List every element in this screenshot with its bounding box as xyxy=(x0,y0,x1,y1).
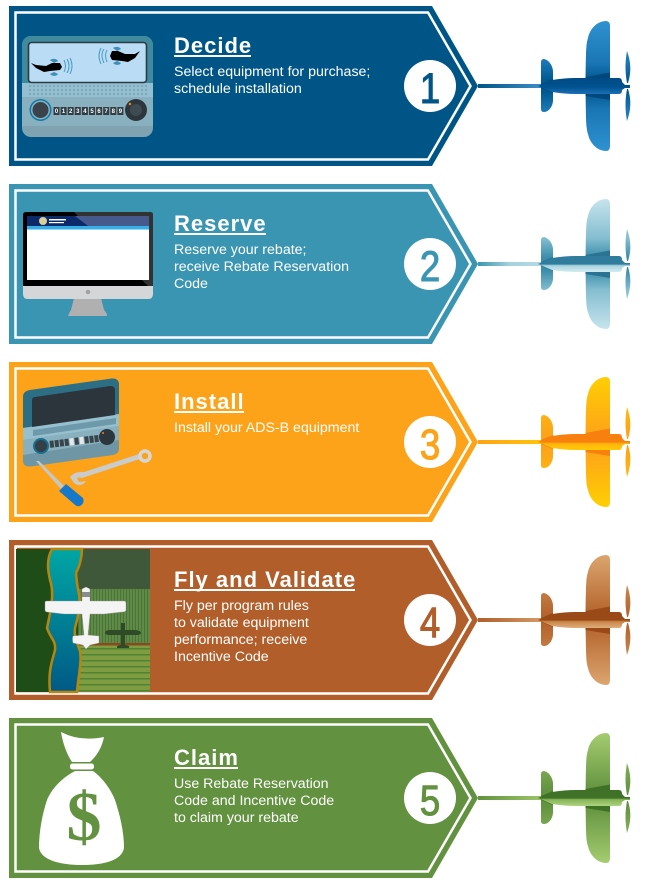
heading: decide: Decide xyxy=(174,33,252,58)
text: decide description: Select equipment for purchase; xyxy=(174,64,370,80)
inner border 2 xyxy=(16,190,470,338)
connector line 4 xyxy=(478,618,542,622)
inner border 1 xyxy=(16,12,470,160)
icon: ADS-B receiver with planes: 8 xyxy=(112,109,116,115)
panel: step 2 reserve xyxy=(9,184,630,344)
text: fly and validate description: Fly per program rules xyxy=(174,598,309,614)
icon: ADS-B receiver with planes: 5 xyxy=(90,109,94,115)
arrow panel shape 1 xyxy=(9,6,478,166)
connector line 1 xyxy=(478,84,542,88)
icon: ADS-B receiver with planes: 3 xyxy=(76,109,80,115)
inner border 4 xyxy=(16,546,470,694)
text: claim description: Use Rebate Reservation xyxy=(174,776,329,792)
icon: ADS-B receiver with planes xyxy=(22,36,153,137)
arrow panel shape 5 xyxy=(9,718,478,878)
number badge 5: 5 xyxy=(420,777,440,825)
icon: plane 3 xyxy=(538,377,630,507)
icon: ADS-B receiver with planes: 7 xyxy=(105,109,109,115)
icon: money bag xyxy=(39,732,124,865)
number badge 3: 3 xyxy=(420,421,440,469)
text: reserve description: receive Rebate Reservation xyxy=(174,259,349,275)
connector line 2 xyxy=(478,262,542,266)
number badge 4: 4 xyxy=(420,599,440,647)
icon: plane 2 xyxy=(538,199,630,329)
heading: install: Install xyxy=(174,389,245,414)
icon: plane 5 xyxy=(538,733,630,863)
icon: money bag: $ xyxy=(66,779,102,856)
connector line 3 xyxy=(478,440,542,444)
number badge 5 xyxy=(404,772,456,825)
arrow panel shape 2 xyxy=(9,184,478,344)
icon: ADS-B receiver with planes: 1 xyxy=(62,109,66,115)
icon: ADS-B receiver with planes: 4 xyxy=(83,109,87,115)
text: install description: Install your ADS-B equipment xyxy=(174,420,359,436)
arrow panel shape 3 xyxy=(9,362,478,522)
text: claim description: Code and Incentive Code xyxy=(174,793,334,809)
text: fly and validate description: Incentive Code xyxy=(174,649,269,665)
number badge 1 xyxy=(404,60,456,113)
text: fly and validate description: to validate equipment xyxy=(174,615,309,631)
icon: ADS-B receiver with planes: 0 xyxy=(55,109,59,115)
number badge 2 xyxy=(404,238,456,291)
arrow panel shape 4 xyxy=(9,540,478,700)
heading: claim: Claim xyxy=(174,745,239,770)
panel: step 4 fly and validate xyxy=(9,540,630,700)
icon: plane 4 xyxy=(538,555,630,685)
icon: receiver with tools xyxy=(23,378,150,506)
number badge 4 xyxy=(404,594,456,647)
connector line 5 xyxy=(478,796,542,800)
icon: ADS-B receiver with planes: 9 xyxy=(119,109,123,115)
icon: desktop monitor xyxy=(23,212,153,316)
panel: step 1 decide xyxy=(9,6,630,166)
number badge 2: 2 xyxy=(420,243,440,291)
panel: step 3 install xyxy=(9,362,630,522)
icon: plane 1 xyxy=(538,21,630,151)
icon: ADS-B receiver with planes: 2 xyxy=(69,109,73,115)
text: reserve description: Code xyxy=(174,276,208,292)
number badge 3 xyxy=(404,416,456,469)
number badge 1: 1 xyxy=(420,65,440,113)
illustration: plane over landscape xyxy=(16,549,150,692)
inner border 3 xyxy=(16,368,470,516)
text: decide description: schedule installation xyxy=(174,81,302,97)
text: fly and validate description: performance; receive xyxy=(174,632,307,648)
heading: fly and validate: Fly and Validate xyxy=(174,567,356,592)
text: reserve description: Reserve your rebate; xyxy=(174,242,306,258)
heading: reserve: Reserve xyxy=(174,211,267,236)
text: claim description: to claim your rebate xyxy=(174,810,299,826)
inner border 5 xyxy=(16,724,470,872)
icon: ADS-B receiver with planes: 6 xyxy=(97,109,101,115)
panel: step 5 claim xyxy=(9,718,630,878)
